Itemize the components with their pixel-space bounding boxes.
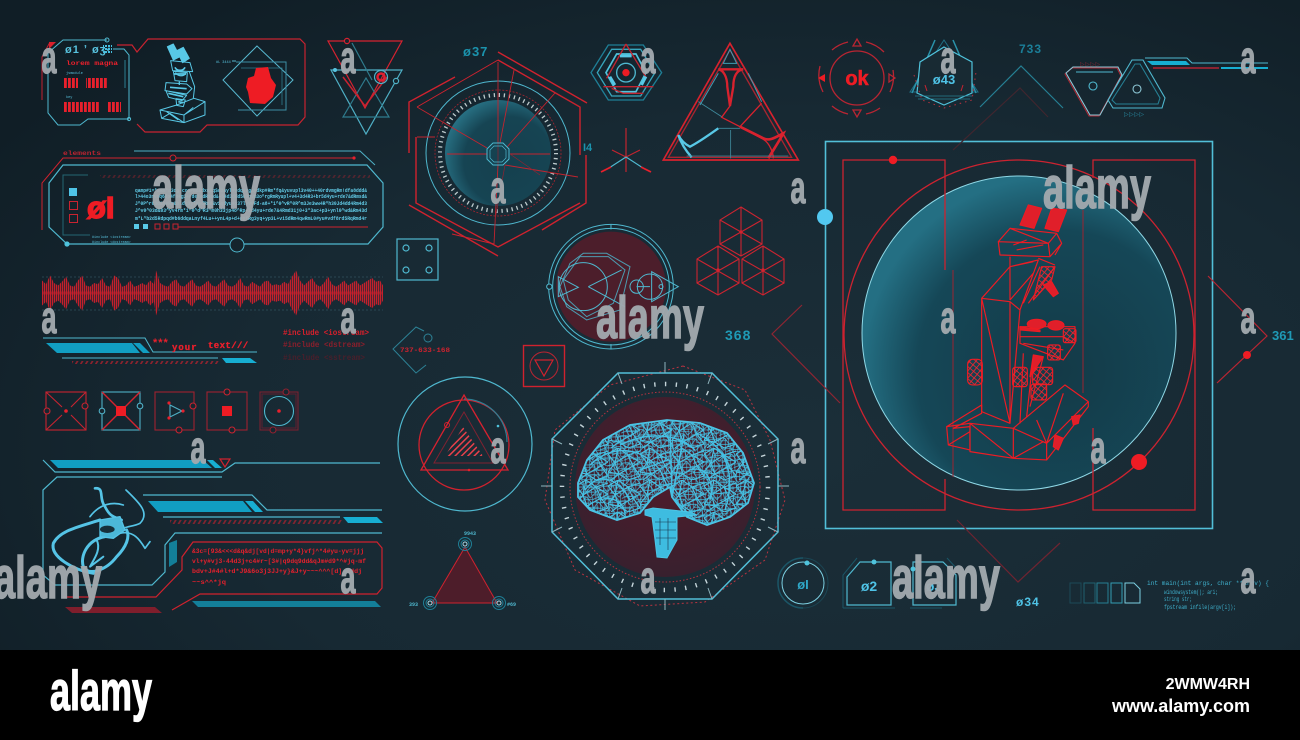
icon: triangle with three nodes: 393 <box>409 602 418 608</box>
panel: 01 text panel: elements <box>63 150 102 157</box>
text block: red pseudo-code <box>192 547 366 586</box>
label: 733: 733 <box>1019 42 1042 56</box>
panel: microscope and heart card <box>117 39 305 132</box>
icon: target button <box>260 389 298 433</box>
text block: code listing: fpstream infile(argv[i]); <box>1164 604 1236 611</box>
text block: red include lines: #include <sstream> <box>283 354 365 363</box>
icon: small hexagon reactor <box>591 44 662 100</box>
watermark: alamy stamps: a <box>42 32 57 83</box>
icon: triangular tri-blade <box>663 43 798 160</box>
icon: stop button <box>207 389 247 433</box>
icon: heart in diamond <box>216 46 293 116</box>
watermark: alamy stamps: a <box>42 292 57 343</box>
panel: top-left readout card: key <box>66 95 72 100</box>
watermark: alamy stamps: alamy <box>152 155 260 221</box>
icon: filled cross button <box>99 392 143 430</box>
icon: interlocked tri-shapes <box>1065 58 1268 118</box>
text block: pseudo-code rows: J^0P^r03d&n#Rm&bldg3yl#ydRmd&v$qdyu4o37l+v0Fd-a8+*1^0^vR^0R^m3Je3ww4R^h30Jd4dd4Rm4d3 <box>135 201 367 207</box>
label: 037: ø37 <box>463 44 488 59</box>
icon: 01 round badge: øI <box>797 577 809 592</box>
watermark: alamy stamps: a <box>340 552 356 603</box>
panel: top-left readout card: ø1 ʼ øʒ‹ <box>65 44 111 56</box>
panel: top-left readout card: lorem magna <box>66 60 119 67</box>
footer: black stock-photo bar: www.alamy.com <box>1111 696 1250 716</box>
panel: microscope viewer <box>817 142 1212 528</box>
text block: code listing: string str; <box>1164 596 1192 603</box>
chart: audio waveform <box>42 270 383 316</box>
icon: interlocked tri-shapes: ▷▷▷▷ <box>1080 62 1100 68</box>
text block: pseudo-code rows: qamp#1=*aRm*r3dg cooPmd&dxd&q$d3ayl#ydqvrgaydkp#Rm*fq&yuvupl3v40++40rdvmgRm!dfa8ddd& <box>135 188 368 194</box>
chart: hexagonal compass dial <box>409 52 587 256</box>
text block: red pseudo-code: vl+y#vj3-44d3j+c4#r~[3#|q9dq9dd&qJm#d9*^#jq-mf <box>192 557 366 565</box>
arrow: top chevrons <box>953 66 1063 150</box>
panel: your text bar: your <box>172 343 198 353</box>
label: 368: 368 <box>725 327 751 343</box>
panel: 01 text panel: #include <dostream> <box>92 240 131 245</box>
watermark: alamy stamps <box>0 32 1256 611</box>
icon: interlocked tri-shapes: ▷▷▷▷ <box>1124 112 1144 118</box>
text block: pseudo-code rows: m*L^b2d5Rdpqd#b6ddqaLnyf4Lu++ynL4p+d+#pfRg3yq+yp3L+vi5dRm4qwRmL0#yu#vdf8rd5RqRmd4r <box>135 216 367 222</box>
chart: red disc schematic <box>547 224 678 349</box>
panel: top-left readout card: jsmodule <box>66 71 83 76</box>
chart: octagon brain scanner <box>541 362 789 610</box>
arrow: right chevron with dot <box>1208 276 1267 383</box>
icon: ok dial: ok <box>845 68 870 90</box>
watermark: alamy stamps: a <box>340 32 356 83</box>
icon: ok dial <box>818 39 895 117</box>
panel: your text bar: text/// <box>208 341 249 351</box>
text block: red include lines: #include <iostream> <box>283 329 369 338</box>
icon: small cyan microscope <box>160 44 205 123</box>
text block: red include lines: #include <dstream> <box>283 341 365 350</box>
watermark: alamy stamps: a <box>790 162 806 213</box>
icon: triangle with three nodes <box>409 531 516 610</box>
chart: hatched triangle in rings <box>398 377 532 511</box>
icon: organism <box>53 488 150 573</box>
icon: 043 hexagon badge <box>910 40 978 108</box>
watermark: alamy stamps: a <box>940 292 956 343</box>
panel: your text bar <box>43 337 257 364</box>
icon: play button <box>155 392 196 433</box>
icon: 03 chip badge: ø3 <box>926 578 942 594</box>
text block: pseudo-code rows: J^v0^03d&03^yv4rm*1^0^d^R3^m0h33jp4o^Rp+3d4yu+rde7&4Rmd31j0+3*3ac+p3+ynl0^wd&Rm43d <box>135 208 367 214</box>
watermark: alamy stamps: alamy <box>596 285 704 351</box>
icon: triangle in square <box>524 346 564 386</box>
text block: red include lines <box>283 329 369 363</box>
icon: nested triangles <box>328 38 402 134</box>
icon: heart in diamond: #L 3444 <box>216 61 231 65</box>
panel: your text bar: *** <box>153 337 169 349</box>
icon: cube cluster <box>697 207 784 295</box>
watermark: alamy stamps: a <box>340 292 356 343</box>
text block: code listing: windowsystem(); ari; <box>1164 589 1218 596</box>
label: diamond code tag: 737-633-168 <box>400 347 450 354</box>
watermark: alamy stamps: alamy <box>1043 155 1151 221</box>
watermark: alamy stamps: a <box>1240 292 1256 343</box>
icon: four-hole square <box>397 239 438 280</box>
watermark: alamy stamps: a <box>640 552 656 603</box>
watermark: alamy stamps: a <box>490 422 506 473</box>
text block: pseudo-code rows <box>135 188 368 222</box>
text block: red pseudo-code: bdv+J#4#l+d*J9&6o3j3JJ+y}&J+y~~~^^^[d]-4ddj <box>192 567 362 575</box>
icon: 02 chip badge: ø2 <box>861 578 877 594</box>
watermark: alamy stamps: a <box>790 422 806 473</box>
illustration: wireframe brain <box>578 420 754 558</box>
icon: cross button <box>44 392 88 430</box>
icon: 043 hexagon badge: ø43 <box>933 72 955 87</box>
label: 034: ø34 <box>1016 595 1040 609</box>
panel: 01 text panel <box>42 150 383 252</box>
watermark: alamy stamps: a <box>1090 422 1106 473</box>
panel: specimen card with organism <box>43 459 383 613</box>
panel: top-left readout card <box>42 38 131 125</box>
label: 01: øI <box>87 190 115 225</box>
footer: black stock-photo bar: 2WMW4RH <box>1166 676 1250 693</box>
icon: 01 round badge <box>778 558 828 608</box>
watermark: alamy stamps: alamy <box>892 545 1000 611</box>
watermark: alamy stamps: a <box>190 422 206 473</box>
label: diamond code tag <box>393 327 450 373</box>
watermark: alamy stamps: a <box>1240 32 1256 83</box>
watermark: alamy stamps: a <box>490 162 506 213</box>
text block: red pseudo-code: &3c=[93&<<<d&q&dj[vd|d=mp+y*4}vfj^*4#yu-yv=jjj <box>192 547 364 555</box>
footer: black stock-photo bar <box>0 650 1300 740</box>
label: 361: 361 <box>1272 328 1294 343</box>
text block: code listing: int main(int args, char **argv) { <box>1147 580 1269 587</box>
arrow: left chevron <box>772 305 840 403</box>
arrow: bottom chevron <box>957 520 1060 582</box>
watermark: alamy stamps: a <box>1240 552 1256 603</box>
watermark: alamy stamps: a <box>640 32 656 83</box>
watermark: alamy stamps: a <box>940 32 956 83</box>
illustration: red wireframe microscope <box>947 205 1088 460</box>
text block: code listing <box>1147 580 1269 611</box>
text block: red pseudo-code: ~~s^^*jq <box>192 578 226 586</box>
panel: 01 text panel: #include <iostream> <box>92 235 131 240</box>
icon: triangle with three nodes: #69 <box>507 602 516 608</box>
label: 14: I4 <box>583 142 593 154</box>
icon: star cross <box>601 128 651 172</box>
icon: 03 chip badge <box>910 558 958 608</box>
icon: 02 chip badge <box>843 558 895 608</box>
icons: row of five buttons <box>44 389 298 433</box>
text block: pseudo-code rows: l>44o3rvnq6dp4fn4g3+rde7&dRmsd&+54d3ddd503gvm3o^rgRmRyupl+v4+3d4R3+br5d4yu+rde7&dRmsd& <box>135 194 368 200</box>
footer: black stock-photo bar: alamy <box>50 659 152 722</box>
icon: triangle with three nodes: 9943 <box>464 531 476 537</box>
icon: file tabs <box>1070 583 1140 603</box>
